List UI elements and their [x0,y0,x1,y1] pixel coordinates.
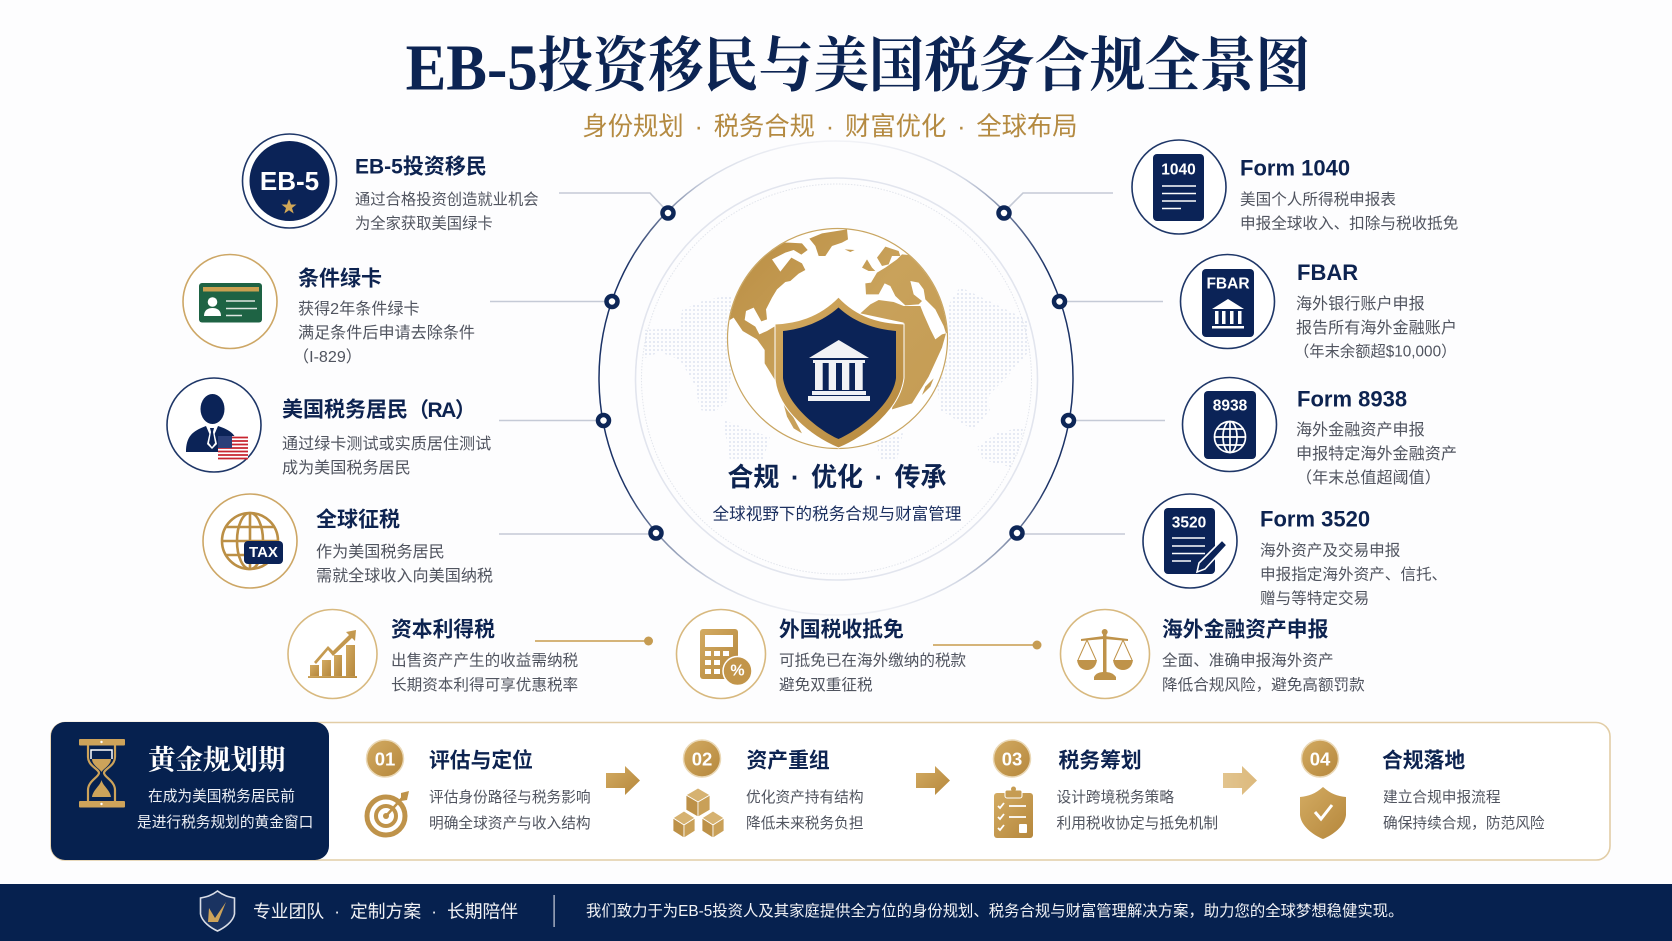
description: 评估身份路径与税务影响 [429,789,591,806]
hub motto: 合规 · 优化 · 传承 [727,462,947,492]
description: 长期资本利得可享优惠税率 [391,676,578,694]
heading: Form 3520 [1260,506,1370,532]
connector [933,640,1042,650]
item: Form 8938 [1182,378,1457,487]
description: 满足条件后申请去除条件 [298,324,475,342]
number badge [684,740,720,777]
description: 美国个人所得税申报表 [1240,190,1396,208]
description: 申报全球收入、扣除与税收抵免 [1240,214,1458,232]
description: 为全家获取美国绿卡 [355,214,493,232]
item: conditional green card [183,254,475,366]
heading: Form 8938 [1297,386,1407,412]
description: 海外银行账户申报 [1296,295,1425,313]
icon: clipboard [994,786,1033,838]
description: 报告所有海外金融账户 [1296,319,1457,337]
description: 明确全球资产与收入结构 [429,814,591,832]
heading: 黄金规划期 [148,744,286,775]
icon: scales [1060,610,1150,698]
number badge: 02 [692,748,712,770]
globe [725,228,955,448]
description [1383,789,1545,832]
icon: green card [183,254,277,348]
icon: 8938 document: 8938 [1213,398,1248,414]
icon: globe with TAX tag: TAX [249,544,278,561]
description: 出售资产产生的收益需纳税 [391,652,579,670]
footer slogan: 专业团队 · 定制方案 · 长期陪伴 [253,902,518,922]
description [779,652,967,694]
heading: 税务筹划 [1058,750,1142,772]
description: 确保持续合规，防范风险 [1383,815,1545,832]
description [1162,652,1365,694]
description: 降低合规风险，避免高额罚款 [1162,676,1365,694]
icon: calculator: % [730,662,745,680]
heading: 全球征税 [316,508,400,532]
icon: 8938 document [1182,378,1276,472]
icon: person with flag [167,378,261,472]
hub caption: 全球视野下的税务合规与财富管理 [713,504,962,524]
description: 全面、准确申报海外资产 [1162,652,1334,670]
description [316,543,493,585]
connector lines and nodes [490,193,1165,538]
description: 申报指定海外资产、信托、 [1260,566,1447,584]
item: EB-5 [242,134,539,232]
item: FBAR [1180,254,1457,360]
footer band [0,884,1672,941]
description: 通过绿卡测试或实质居住测试 [282,435,491,453]
number badge: 01 [375,748,395,770]
icon: globe with TAX tag [203,494,297,588]
icon: FBAR document [1180,254,1274,348]
icon: hourglass [79,739,125,808]
temple icon [808,340,870,401]
shield with temple [775,297,904,448]
subtitle: 身份规划 · 税务合规 · 财富优化 · 全球布局 [582,113,1078,141]
description: 海外资产及交易申报 [1260,542,1401,560]
icon: EB-5 badge [242,134,336,228]
description: （I-829） [293,348,362,366]
description: 在成为美国税务居民前 [148,788,295,805]
icon: calculator [676,610,766,698]
icon: check shield [1300,787,1346,839]
description: 申报特定海外金融资产 [1296,445,1457,463]
description: 通过合格投资创造就业机会 [355,192,539,208]
number badge: 04 [1310,748,1331,770]
dotted world map [643,287,1030,467]
item: worldwide taxation [203,494,493,588]
item: foreign tax credit [676,610,1042,698]
heading: FBAR [1297,260,1358,285]
connector [535,636,653,646]
panel: golden planning period [51,722,1610,860]
heading: 美国税务居民（RA） [282,398,474,422]
heading: Form 1040 [1240,156,1350,180]
divider [554,895,555,927]
step 02 [673,740,864,838]
icon: FBAR document: FBAR [1206,276,1250,292]
icon: footer shield [200,891,234,931]
icon: flag [218,436,248,459]
arrow [606,766,640,795]
outer ring arc [599,141,1073,615]
description [1296,421,1457,487]
description [137,788,313,831]
description: 优化资产持有结构 [746,789,864,806]
title: EB-5投资移民与美国税务合规全景图 [406,30,1310,103]
icon: 3520 document with pen: 3520 [1172,514,1206,532]
heading: 海外金融资产申报 [1162,618,1329,642]
description [1056,788,1218,832]
description [1240,190,1458,232]
heading: 资产重组 [746,750,830,772]
description: 赠与等特定交易 [1260,590,1369,608]
description [282,435,491,477]
icon: rising bars [288,610,377,698]
description: 利用税收协定与抵免机制 [1056,815,1218,832]
description [355,192,539,232]
description: （年末总值超阈值） [1296,469,1441,487]
description [746,789,864,832]
inner rings [636,178,1038,580]
icon: cubes [673,788,724,838]
icon: 1040 document: 1040 [1161,162,1196,178]
footer statement: 我们致力于为EB-5投资人及其家庭提供全方位的身份规划、税务合规与财富管理解决方案，助力您的全球梦想稳健实现。 [586,902,1403,920]
item: Form 3520 [1143,494,1447,608]
heading: 外国税收抵免 [779,618,904,642]
heading: 评估与定位 [429,748,533,772]
arrow [1223,766,1257,795]
description: 降低未来税务负担 [746,815,864,832]
description: 海外金融资产申报 [1296,421,1425,439]
icon: target [367,791,409,835]
heading: 条件绿卡 [298,268,382,290]
heading: 合规落地 [1382,750,1465,772]
description [429,789,591,832]
process card outline [51,722,1610,860]
description: 可抵免已在海外缴纳的税款 [779,652,967,670]
item: Form 1040 [1132,140,1458,234]
description [391,652,579,694]
navy callout box [51,722,329,860]
description: 获得2年条件绿卡 [298,300,420,318]
step 03 [994,740,1218,838]
number badge [994,740,1030,777]
heading: EB-5投资移民 [355,156,487,178]
description: 避免双重征税 [779,676,873,694]
item: foreign financial asset reporting [1060,610,1365,698]
description [293,300,475,366]
description: 设计跨境税务策略 [1056,788,1174,806]
description [1294,295,1457,360]
number badge [366,740,404,777]
number badge [1302,740,1338,777]
icon: 3520 document with pen [1143,494,1237,588]
description [1260,542,1447,608]
heading: 资本利得税 [391,618,495,642]
icon: 1040 document [1132,140,1226,234]
item: US tax resident [167,378,491,477]
description: 建立合规申报流程 [1383,789,1501,806]
item: capital gains tax [288,610,653,698]
description: 作为美国税务居民 [316,543,445,561]
description: 是进行税务规划的黄金窗口 [137,813,313,831]
step 04 [1300,740,1545,839]
central hub diagram [599,141,1073,615]
description: （年末余额超$10,000） [1294,342,1456,360]
step 01 [366,740,591,835]
icon: EB-5 badge: EB-5 [260,166,319,196]
number badge: 03 [1002,748,1022,770]
arrow [916,766,950,795]
description: 成为美国税务居民 [282,459,411,477]
description: 需就全球收入向美国纳税 [316,567,493,585]
